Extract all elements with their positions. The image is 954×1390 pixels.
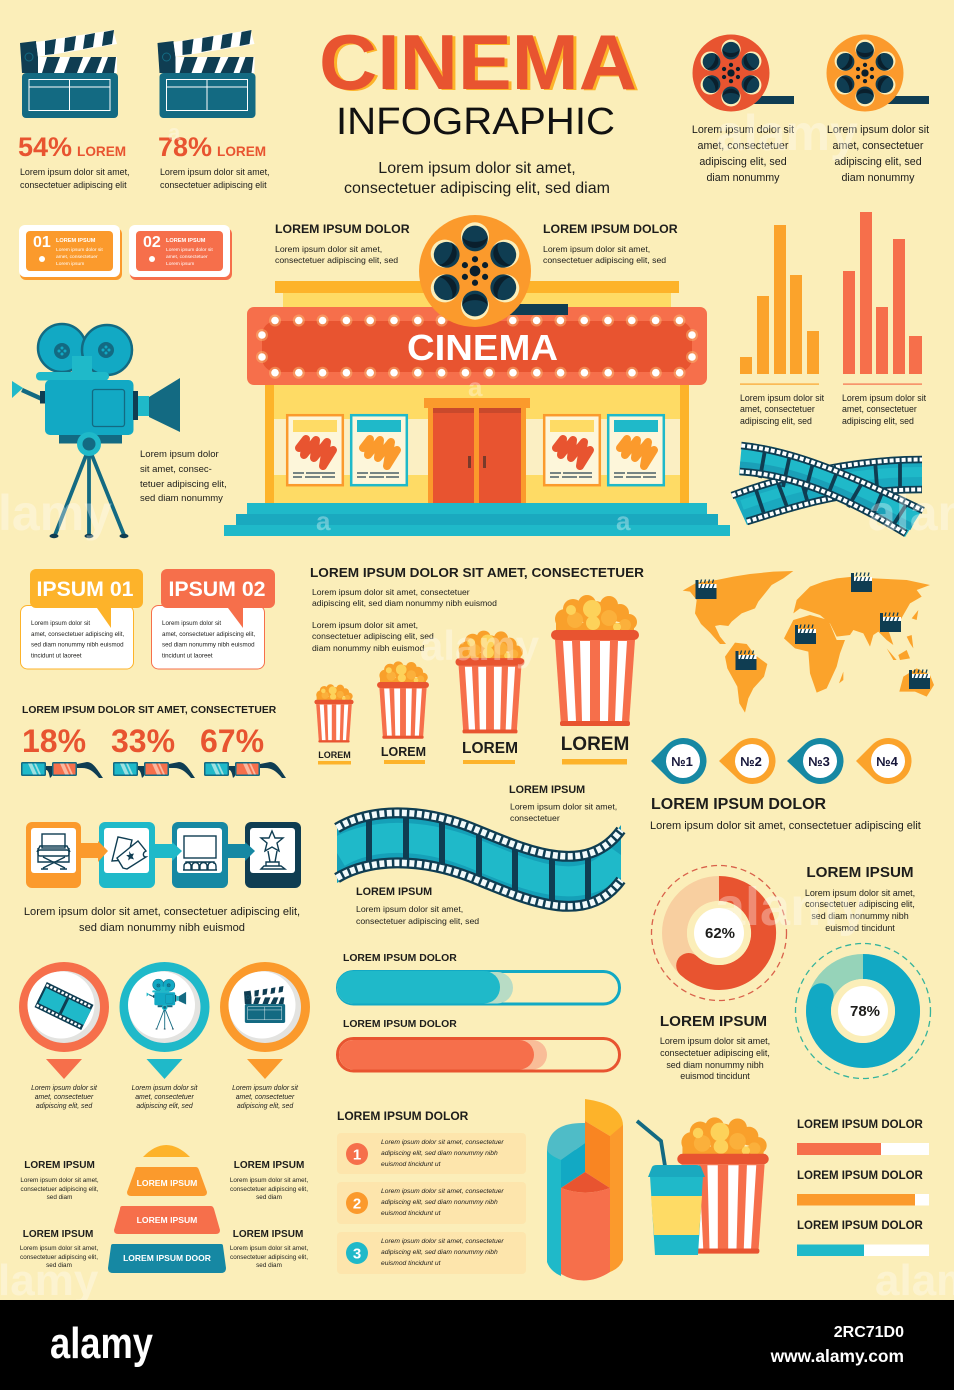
icon: cinema screen and seats [183,836,217,870]
film strip front [739,442,924,537]
icon: film reel orange [826,34,929,112]
list item 3: Lorem ipsum dolor sit amet, consectetuer [381,1238,504,1245]
text: reel caption right: amet, consectetuer [833,140,924,152]
progress bar 2 [338,1019,620,1071]
arrow 2 [155,842,182,861]
chart: 3D cylinder [547,1099,623,1281]
icon: clapperboard [20,30,118,118]
panel: tab card 02: Lorem ipsum dolor sit [166,247,213,253]
text block: wave film top: consectetuer [510,813,560,823]
panel: clapperboard stat 78% [158,30,270,190]
text block: wave film bottom: Lorem ipsum dolor sit amet, [356,904,463,914]
text: process caption: Lorem ipsum dolor sit amet, consectetuer adipiscing elit, [24,906,300,918]
footer band [0,1300,954,1390]
pin: clapper [220,962,310,1079]
list item 2: euismod tincidunt ut [381,1210,442,1217]
pyramid chart [108,1145,226,1273]
badge 1: №1 [671,754,693,769]
watermark overlay: a [168,120,181,145]
panel: tab card 02: LOREM IPSUM [166,238,206,244]
watermark overlay: alamy [715,877,868,937]
callout: IPSUM 01: tincidunt ut laoreet [31,652,82,660]
text: popcorn paragraph 2: consectetuer adipiscing elit, sed [312,631,434,641]
donut chart 62%: 62% [705,925,735,942]
text: pyramid upper right: Lorem ipsum dolor sit amet, [230,1177,308,1184]
list item 1: 1 [353,1146,361,1164]
text block: donut upper: sed diam nonummy nibh [811,911,909,921]
popcorn size 4 [551,595,639,764]
text block: donut lower [660,1013,770,1081]
donut chart 62% [652,866,786,1000]
text: reel caption left: adipiscing elit, sed [699,156,787,168]
watermark overlay: lamy [0,1256,99,1305]
list item 2: 2 [353,1196,361,1212]
image id: 2RC71D0 [834,1324,904,1341]
panel: tab card 01: Lorem ipsum dolor sit [56,247,103,253]
progress strip 1 [797,1119,929,1155]
text: bar caption right: adipiscing elit, sed [842,416,914,426]
text block: donut upper: consectetuer adipiscing elit, [805,899,915,909]
text: pyramid lower right: consectetuer adipiscing elit, [230,1254,308,1261]
text block: donut lower: Lorem ipsum dolor sit amet, [660,1036,770,1046]
text: pyramid lower left [20,1229,98,1269]
watermark overlay: alamy [716,105,858,161]
popcorn size 1: LOREM [318,750,351,760]
list item 2 [337,1182,526,1224]
pin: camera [120,962,210,1079]
list item 1 [337,1133,526,1174]
text block: wave film bottom: LOREM IPSUM [356,886,432,898]
progress strip 2 [797,1170,929,1206]
list item 3 [337,1232,526,1274]
text block: donut lower: sed diam nonummy nibh [666,1060,764,1070]
pyramid chart: LOREM IPSUM DOOR [123,1253,211,1263]
subtitle: INFOGRAPHIC: INFOGRAPHIC [336,101,615,143]
text block: wave film bottom [356,886,479,926]
progress strip 2: LOREM IPSUM DOLOR [797,1170,924,1182]
panel: tab card 01 [19,225,122,280]
progress bar 1 [337,953,620,1004]
text: pyramid upper left: Lorem ipsum dolor sit amet, [20,1177,99,1184]
marquee sign [247,307,707,385]
text: pyramid upper right: sed diam [256,1194,282,1201]
text: popcorn paragraph 2: diam nonummy nibh euismod [312,643,424,653]
text: pin caption 1: Lorem ipsum dolor sit [31,1085,98,1092]
progress strip 3: LOREM IPSUM DOLOR [797,1220,924,1232]
popcorn size 1 [314,684,354,764]
text: badges caption: Lorem ipsum dolor sit amet, consectetuer adipiscing elit [650,820,921,832]
film strip back [732,456,922,525]
text block: building left: Lorem ipsum dolor sit amet, [275,244,382,254]
text: popcorn paragraph 2: Lorem ipsum dolor sit amet, [312,620,418,630]
pyramid chart: LOREM IPSUM [137,1178,197,1188]
panel: tab card 02: 02 [143,234,161,251]
text: pyramid upper left [20,1160,99,1201]
illustration: wave film strip [334,807,626,912]
text block: donut lower: consectetuer adipiscing elit, [660,1048,770,1058]
stat 33%: 33% [111,723,175,759]
text: reel caption left: Lorem ipsum dolor sit [692,124,794,136]
illustration: crossed film strips [732,442,924,537]
callout: IPSUM 02 [152,569,275,669]
badge 4: №4 [876,754,899,769]
bar chart: orange [740,225,819,385]
text block: donut lower: LOREM IPSUM [660,1013,767,1030]
text block: wave film top [509,784,617,823]
list item 3: adipiscing elit, sed diam nonummy nibh [381,1249,498,1256]
text: bar caption right: Lorem ipsum dolor sit [842,393,927,403]
callout: IPSUM 02: IPSUM 02 [168,577,266,601]
text block: building left [275,222,410,265]
text: pyramid lower right: Lorem ipsum dolor sit amet, [230,1245,308,1252]
text: camera caption: tetuer adipiscing elit, [140,479,227,490]
text: pin caption 3: Lorem ipsum dolor sit [232,1085,299,1092]
popcorn size 3 [455,631,525,764]
heading: badges: LOREM IPSUM DOLOR [651,796,827,813]
popcorn size 2 [377,661,429,764]
text: bar caption left: Lorem ipsum dolor sit [740,393,825,403]
list item 3: 3 [353,1246,361,1262]
text: pyramid lower right: sed diam [256,1262,282,1269]
stat 67% [200,723,286,778]
poster 2 [351,415,407,485]
caption: consectetuer adipiscing elit [20,180,127,190]
donut chart 78%: 78% [850,1003,880,1020]
text: process caption: sed diam nonummy nibh euismod [79,922,245,934]
text: bar caption left: adipiscing elit, sed [740,416,812,426]
website: www.alamy.com [770,1346,904,1366]
badge 2 [719,738,776,784]
arrow 1 [81,841,108,862]
text block: wave film top: LOREM IPSUM [509,784,585,796]
callout: IPSUM 01: amet, consectetuer adipiscing elit, [31,631,124,638]
title: CINEMA: CINEMA [319,18,637,106]
text block: donut upper: Lorem ipsum dolor sit amet, [805,888,915,898]
text block: wave film top: Lorem ipsum dolor sit amet, [510,802,617,812]
heading: 3D glasses stats: LOREM IPSUM DOLOR SIT AMET, CONSECTETUER [22,705,277,716]
popcorn size 4: LOREM [561,734,629,755]
callout: IPSUM 02: tincidunt ut laoreet [162,652,213,660]
text: pin caption 3: amet, consectetuer [236,1094,295,1101]
stat 18% [21,723,103,778]
poster 4 [608,415,664,485]
text: reel caption right: diam nonummy [841,172,915,184]
text block: building right: Lorem ipsum dolor sit amet, [543,244,650,254]
heading: numbered list: LOREM IPSUM DOLOR [337,1109,469,1123]
icon: film reel red [692,34,794,112]
text: camera caption: sit amet, consec- [140,464,212,475]
callout: IPSUM 01: IPSUM 01 [36,577,134,601]
caption: Lorem ipsum dolor sit amet, [20,167,130,177]
badge 3 [787,738,844,784]
badge 4 [856,738,912,784]
text block: donut upper: euismod tincidunt [825,923,895,933]
progress strip 3 [797,1220,929,1256]
heading: popcorn section: LOREM IPSUM DOLOR SIT AMET, CONSECTETUER [310,566,644,580]
text: pyramid upper right: LOREM IPSUM [234,1160,304,1171]
panel: tab card 02 [129,225,232,280]
icon: clapperboard [158,30,256,118]
text: popcorn paragraph 1: Lorem ipsum dolor sit amet, consectetuer [312,587,470,597]
text block: building right [543,222,678,265]
text block: building right: LOREM IPSUM DOLOR [543,222,678,236]
text: pyramid lower left: LOREM IPSUM [23,1229,93,1240]
text: pyramid upper left: LOREM IPSUM [24,1160,95,1171]
text: pyramid upper left: consectetuer adipiscing elit, [21,1186,99,1193]
pyramid chart: LOREM IPSUM [137,1215,197,1225]
stat 54%: 54% LOREM [18,132,126,162]
arrow 3 [228,842,255,861]
text block: building left: consectetuer adipiscing elit, sed [275,255,398,265]
panel: clapperboard stat 54% [18,30,130,190]
bar chart: coral [843,212,922,385]
door [424,398,530,503]
watermark overlay: a [316,506,331,536]
text: pyramid upper right [230,1160,308,1201]
illustration: popcorn and drink [637,1117,769,1255]
illustration: movie camera [12,324,180,538]
popcorn size 2: LOREM [381,745,426,759]
marquee sign: CINEMA [407,327,558,368]
poster 3 [544,415,600,485]
callout: IPSUM 02: amet, consectetuer adipiscing elit, [162,631,255,638]
steps [224,503,730,536]
list item 2: Lorem ipsum dolor sit amet, consectetuer [381,1188,504,1195]
illustration: cinema building [224,215,730,536]
watermark overlay: a [468,372,483,402]
text: pyramid upper left: sed diam [47,1194,72,1201]
panel: tab card 02: amet, consectetuer [166,254,208,260]
progress bar 2: LOREM IPSUM DOLOR [343,1019,457,1030]
text block: building left: LOREM IPSUM DOLOR [275,222,410,236]
panel: tab card 01: LOREM IPSUM [56,238,96,244]
text: pin caption 2: Lorem ipsum dolor sit [132,1085,199,1092]
callout: IPSUM 02: sed diam nonummy nibh euismod [162,642,255,648]
text block: donut upper [805,864,915,933]
text: pin caption 1: adipiscing elit, sed [36,1103,93,1110]
stat 78%: 78% LOREM [158,132,266,162]
text: camera caption: Lorem ipsum dolor [140,449,219,460]
text block: building right: consectetuer adipiscing elit, sed [543,255,666,265]
text: pyramid lower right: LOREM IPSUM [233,1229,303,1240]
callout: IPSUM 01: Lorem ipsum dolor sit [31,620,90,627]
callout: IPSUM 01 [20,569,143,669]
callout: IPSUM 02: Lorem ipsum dolor sit [162,620,221,627]
pin: film strip [19,962,109,1079]
icon: director chair [37,834,70,869]
icon: film frame [34,982,94,1030]
watermark overlay: alamy [420,622,540,669]
panel: tab card 01: Lorem ipsum [56,261,84,267]
stat 33% [111,723,195,778]
panel: tab card 02: Lorem ipsum [166,261,194,267]
text: popcorn paragraph 1: adipiscing elit, sed diam nonummy nibh euismod [312,598,497,608]
callout: IPSUM 01: sed diam nonummy nibh euismod [31,642,124,648]
text: pin caption 1: amet, consectetuer [35,1094,94,1101]
text block: donut upper: LOREM IPSUM [806,864,914,881]
alamy logo: alamy [50,1319,153,1368]
text: pyramid upper right: consectetuer adipiscing elit, [230,1186,308,1193]
text: pyramid lower left: sed diam [46,1262,72,1269]
panel: tab card 01: amet, consectetuer [56,254,98,260]
list item 2: adipiscing elit, sed diam nonummy nibh [381,1199,498,1206]
map: world [683,571,934,713]
text: reel caption left: diam nonummy [706,172,780,184]
text: bar caption right: amet, consectetuer [842,404,917,414]
list item 3: euismod tincidunt ut [381,1260,442,1267]
text: pin caption 3: adipiscing elit, sed [237,1103,294,1110]
stat 67%: 67% [200,723,264,759]
intro text: Lorem ipsum dolor sit amet, [378,160,576,177]
progress bar 1: LOREM IPSUM DOLOR [343,953,457,964]
text: pyramid lower left: consectetuer adipiscing elit, [20,1254,98,1261]
text: reel caption right: adipiscing elit, sed [834,156,922,168]
badge 2: №2 [740,754,762,769]
intro text: consectetuer adipiscing elit, sed diam [344,180,610,197]
caption: consectetuer adipiscing elit [160,180,267,190]
text: pyramid lower left: Lorem ipsum dolor sit amet, [20,1245,98,1252]
text block: donut lower: euismod tincidunt [680,1071,750,1081]
text: camera caption: sed diam nonummy [140,493,223,504]
text block: wave film bottom: consectetuer adipiscing elit, sed [356,916,479,926]
process flow: icon boxes [26,822,301,888]
popcorn size 3: LOREM [462,740,518,757]
progress strip 1: LOREM IPSUM DOLOR [797,1119,924,1131]
text: bar caption left: amet, consectetuer [740,404,815,414]
icon: trophy [261,831,285,869]
title: CINEMA: CINEMA [322,19,640,107]
text: reel caption left: amet, consectetuer [698,140,789,152]
icon: tickets [112,837,146,869]
text: pyramid lower right [230,1229,308,1269]
icon: large film reel [419,215,568,327]
list item 1: Lorem ipsum dolor sit amet, consectetuer [381,1139,504,1146]
poster 1 [287,415,343,485]
panel: tab card 01: 01 [33,234,51,251]
badge 3: №3 [808,754,830,769]
text: pin caption 2: adipiscing elit, sed [136,1103,194,1110]
caption: Lorem ipsum dolor sit amet, [160,167,270,177]
stat 18%: 18% [22,723,86,759]
text: pin caption 2: amet, consectetuer [135,1094,195,1101]
badge 1 [651,738,707,784]
list item 1: euismod tincidunt ut [381,1161,442,1168]
list item 1: adipiscing elit, sed diam nonummy nibh [381,1150,498,1157]
map markers [696,580,716,599]
text: reel caption right: Lorem ipsum dolor sit [827,124,929,136]
watermark overlay: a [616,506,631,536]
donut chart 78% [796,944,930,1078]
watermark overlay: lamy [0,485,112,541]
